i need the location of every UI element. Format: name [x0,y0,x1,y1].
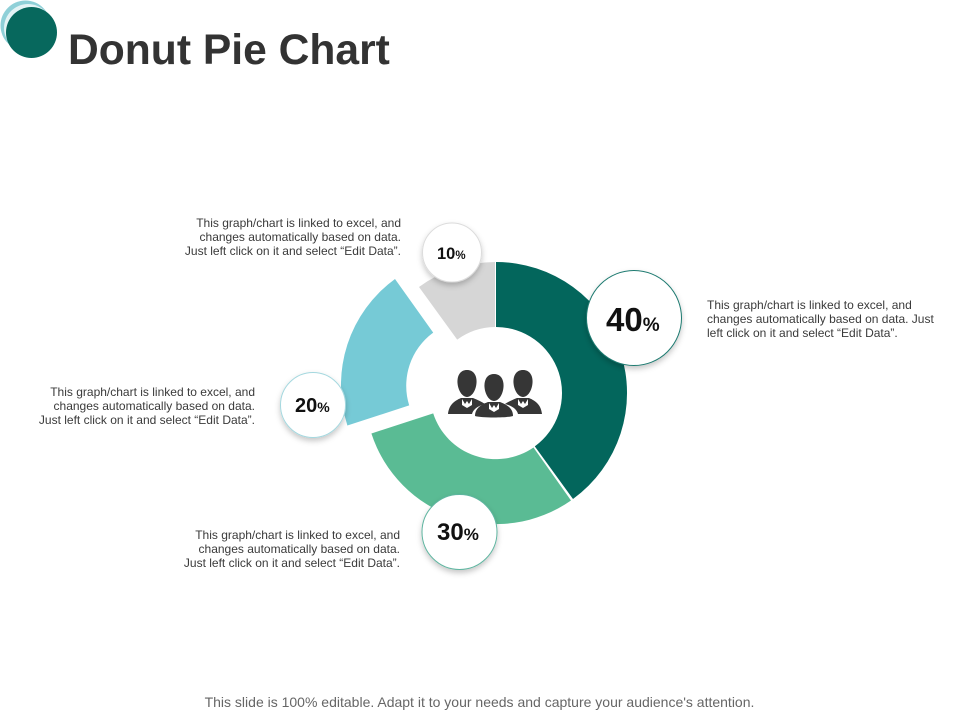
footer note: This slide is 100% editable. Adapt it to your needs and capture your audience's attention. [205,694,754,710]
icon: three business people [448,370,542,418]
callout: 20%: 20% [295,395,330,417]
text block: top left: Just left click on it and select “Edit Data”. [185,244,401,258]
text block: bottom left [184,528,400,570]
text block: top left: changes automatically based on data. [200,230,401,244]
callout: 30% [422,494,497,570]
center person [475,374,513,418]
left person [448,370,485,414]
callout: 40%: 40% [606,301,660,338]
segment: 10% gray [419,262,495,340]
text block: middle left: changes automatically based on data. [54,399,255,413]
segment: 40% dark teal [496,262,627,499]
text block: bottom left: Just left click on it and select “Edit Data”. [184,556,400,570]
callout: 40% [586,270,682,366]
text block: top left [185,216,401,258]
segment: 20% light blue [341,279,433,426]
text block: right: This graph/chart is linked to excel, and [707,298,912,312]
title: Donut Pie Chart [68,26,390,74]
text block: bottom left: This graph/chart is linked to excel, and [195,528,400,542]
callout: 30%: 30% [437,519,479,546]
text block: top left: This graph/chart is linked to excel, and [196,216,401,230]
callout: 20% [280,372,346,438]
text block: right [707,298,934,340]
text block: right: changes automatically based on data. Just [707,312,934,326]
text block: bottom left: changes automatically based on data. [199,542,400,556]
segment: 30% green [371,413,571,524]
callout: 10% [422,223,482,282]
text block: middle left: Just left click on it and select “Edit Data”. [39,413,255,427]
logo: overlapping circles [0,0,57,58]
right person [505,370,542,414]
text block: middle left: This graph/chart is linked to excel, and [50,385,255,399]
callout: 10%: 10% [437,245,466,263]
text block: middle left [39,385,255,427]
text block: right: left click on it and select “Edit Data”. [707,326,898,340]
